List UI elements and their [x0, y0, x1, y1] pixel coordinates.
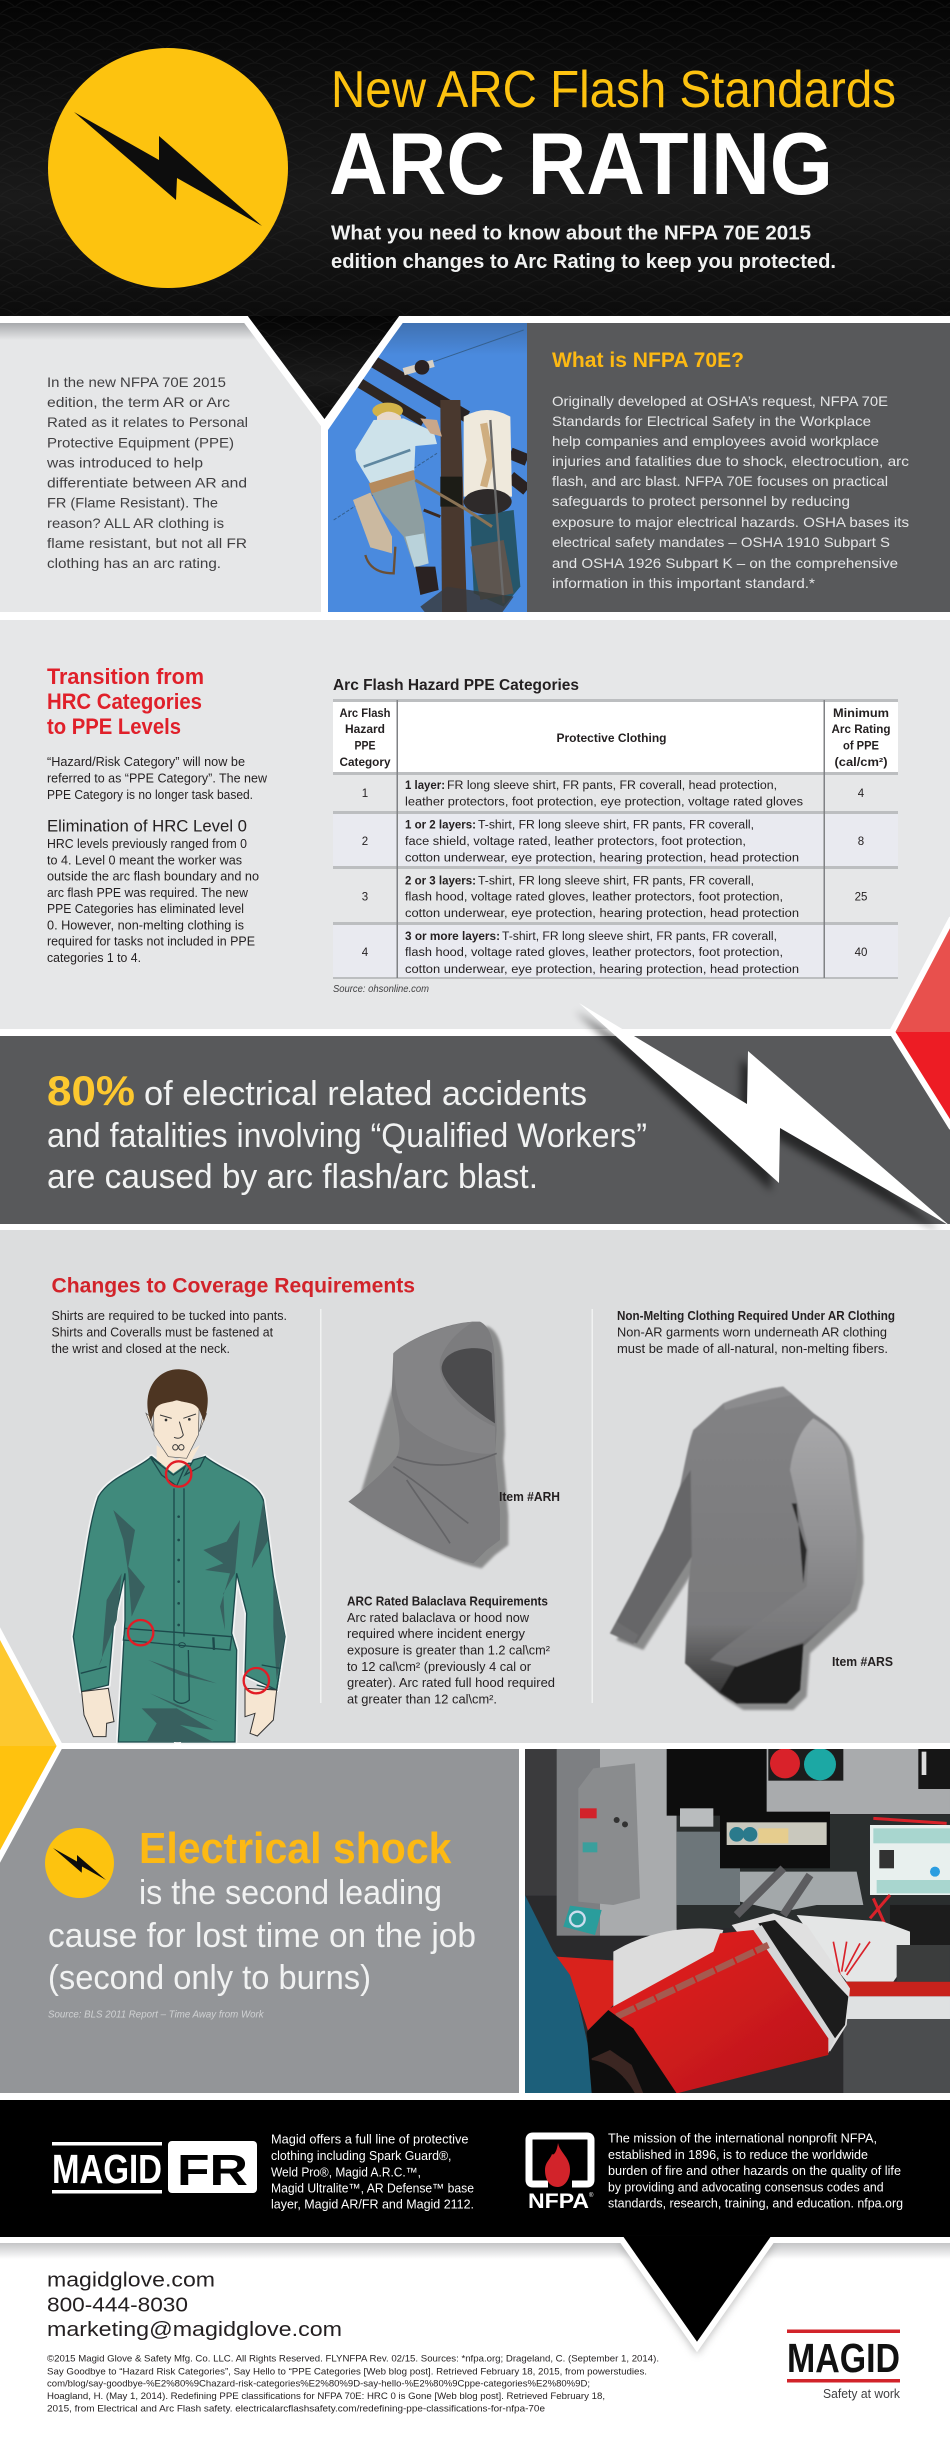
panel: intro left [0, 323, 321, 612]
subtitle: What you need to know about the NFPA 70E 2015 [331, 222, 811, 244]
table row 1: 1 layer: [405, 780, 445, 792]
table header row: PPE [354, 740, 376, 752]
non-melting clothing text: Non-Melting Clothing Required Under AR Clothing [617, 1309, 895, 1323]
shock text: is the second leading [139, 1874, 442, 1912]
subtitle [331, 222, 836, 273]
hazard risk category text: PPE Category is no longer task based. [47, 788, 253, 802]
banner text: are caused by arc flash/arc blast. [47, 1158, 538, 1196]
logo: MAGID FR [52, 2141, 257, 2195]
table row 4: T-shirt, FR long sleeve shirt, FR pants, FR coverall, [502, 931, 777, 943]
NFPA body text: safeguards to protect personnel by reducing [552, 493, 850, 509]
icon: yellow circle with lightning bolt [48, 48, 288, 288]
table row 4: cotton underwear, eye protection, hearing protection, head protection [405, 964, 799, 976]
logo: MAGID Safety at work: MAGID [787, 2335, 900, 2381]
contact details: marketing@magidglove.com [47, 2319, 342, 2341]
non-melting clothing text [617, 1309, 895, 1356]
banner text [47, 1075, 647, 1196]
table source: Source: ohsonline.com [333, 984, 429, 995]
elimination text: categories 1 to 4. [47, 951, 141, 965]
table row 4: 40 [855, 947, 867, 959]
decoration: yellow hexagon [0, 1628, 60, 1862]
Magid description text: Magid offers a full line of protective [271, 2132, 469, 2146]
heading: What is NFPA 70E?: What is NFPA 70E? [552, 349, 744, 372]
table header row: Minimum [833, 708, 889, 720]
shock source: Source: BLS 2011 Report – Time Away from Work [48, 2008, 264, 2020]
logo: MAGID FR: FR [177, 2146, 248, 2195]
title: New ARC Flash Standards: New ARC Flash Standards [331, 61, 896, 119]
legal and sources: Hoagland, H. (May 1, 2014). Redefining PPE classifications for NFPA 70E: HRC 0 is Gone [Web blog post]. Retrieved February 18, [47, 2391, 605, 2401]
table: PPE categories [333, 699, 898, 979]
NFPA body text: information in this important standard.* [552, 575, 816, 591]
logo: NFPA [528, 2136, 594, 2213]
shock text: cause for lost time on the job [48, 1917, 476, 1955]
balaclava requirements text: exposure is greater than 1.2 cal\cm² [347, 1644, 550, 1658]
panel: black footer band [0, 2100, 950, 2237]
legal and sources: com/blog/say-goodbye-%E2%80%9Chazard-risk-categories%E2%80%9D-say-hello-%E2%80%9Cppe-categories%E2%80%9D; [47, 2378, 590, 2388]
hazard risk category text: “Hazard/Risk Category” will now be [47, 755, 245, 769]
intro text: flame resistant, but not all FR [47, 535, 247, 551]
header band [0, 0, 950, 330]
photo: balaclava hood [348, 1322, 508, 1568]
table row 1: 4 [858, 788, 865, 800]
non-melting clothing text: Non-AR garments worn underneath AR clothing [617, 1326, 887, 1340]
legal and sources: Say Goodbye to “Hazard Risk Categories”, Say Hello to “PPE Categories [Web blog post]. Retrieved February 18, 2015, from powerstudies. [47, 2367, 647, 2377]
callouts: red circles on neck, waist, wrist [128, 1461, 269, 1693]
table row 2: T-shirt, FR long sleeve shirt, FR pants, FR coverall, [478, 820, 754, 832]
panel: what is NFPA 70E [527, 323, 950, 612]
intro text: FR (Flame Resistant). The [47, 494, 218, 510]
NFPA body text: and OSHA 1926 Subpart K – on the comprehensive [552, 555, 898, 571]
balaclava requirements text [347, 1594, 555, 1706]
table row 1: 1 [362, 788, 368, 800]
NFPA mission text: established in 1896, is to reduce the worldwide [608, 2148, 868, 2162]
NFPA body text [552, 393, 909, 591]
Magid description text: clothing including Spark Guard®, [271, 2149, 452, 2163]
intro text: differentiate between AR and [47, 474, 247, 490]
table row 3: 2 or 3 layers: [405, 876, 476, 888]
heading: Transition from HRC Categories to PPE Levels [47, 664, 204, 739]
banner text: and fatalities involving “Qualified Workers” [47, 1117, 647, 1155]
table row 2: 8 [858, 836, 864, 848]
table header row [340, 708, 890, 769]
balaclava requirements text: at greater than 12 cal\cm². [347, 1692, 497, 1706]
subtitle: edition changes to Arc Rating to keep you protected. [331, 251, 836, 273]
NFPA mission text: burden of fire and other hazards on the quality of life [608, 2164, 901, 2178]
title: ARC RATING: ARC RATING [329, 114, 833, 213]
legal and sources [47, 2354, 659, 2414]
table row 4: 4 [362, 947, 369, 959]
NFPA body text: injuries and fatalities due to shock, electrocution, arc [552, 453, 909, 469]
table row 2: 1 or 2 layers: [405, 820, 476, 832]
Magid description text: layer, Magid AR/FR and Magid 2112. [271, 2197, 474, 2211]
intro text: Rated as it relates to Personal [47, 414, 248, 430]
shirts text: Shirts and Coveralls must be fastened at [52, 1326, 274, 1340]
stat: 80%: 80% [47, 1067, 135, 1114]
table row 3: flash hood, voltage rated gloves, leather protectors, foot protection, [405, 892, 783, 904]
table header row: Hazard [345, 724, 385, 736]
hazard risk category text: referred to as “PPE Category”. The new [47, 772, 268, 786]
photo: gloved hand at electrical panel [525, 1748, 950, 2093]
shock text: (second only to burns) [48, 1959, 371, 1997]
balaclava requirements text: ARC Rated Balaclava Requirements [347, 1594, 548, 1608]
table title: Arc Flash Hazard PPE Categories [333, 677, 579, 694]
table row 4: flash hood, voltage rated gloves, leather protectors, foot protection, [405, 947, 783, 959]
NFPA mission text [608, 2132, 903, 2211]
NFPA body text: electrical safety mandates – OSHA 1910 Subpart S [552, 534, 890, 550]
NFPA mission text: standards, research, training, and education. nfpa.org [608, 2197, 903, 2211]
NFPA body text: Standards for Electrical Safety in the Workplace [552, 413, 871, 429]
icon: white lightning bolt [575, 1003, 950, 1232]
shirts text: Shirts are required to be tucked into pants. [52, 1309, 287, 1323]
elimination text: arc flash PPE was required. The new [47, 886, 249, 900]
item label: ARS: Item #ARS [832, 1655, 893, 1669]
intro text: clothing has an arc rating. [47, 555, 221, 571]
panel: lineman photo [327, 320, 532, 615]
contact details [47, 2270, 342, 2341]
shirts text [52, 1309, 287, 1356]
table row 3: cotton underwear, eye protection, hearing protection, head protection [405, 908, 799, 920]
intro text: In the new NFPA 70E 2015 [47, 374, 226, 390]
panel: coverage requirements [0, 1230, 950, 1743]
table row 2: 2 [362, 836, 368, 848]
hazard risk category text [47, 755, 268, 802]
logo: NFPA: NFPA [528, 2190, 589, 2213]
elimination text: PPE Categories has eliminated level [47, 902, 244, 916]
table header row: of PPE [843, 740, 879, 752]
intro text: was introduced to help [46, 454, 203, 470]
table row 3 [362, 876, 867, 920]
panel: 80% banner [0, 1036, 950, 1224]
table row 3: T-shirt, FR long sleeve shirt, FR pants, FR coverall, [478, 876, 754, 888]
table header row: Protective Clothing [556, 733, 666, 745]
table row 4 [362, 931, 867, 976]
table header row: (cal/cm²) [834, 757, 888, 769]
illustration: worker in shirt [73, 1369, 285, 1742]
shirts text: the wrist and closed at the neck. [52, 1342, 230, 1356]
elimination text: 0. However, non-melting clothing is [47, 918, 244, 932]
icon: small yellow circle with bolt [45, 1828, 114, 1898]
intro text: reason? ALL AR clothing is [47, 515, 224, 531]
heading: Transition from HRC Categories to PPE Levels: Transition from [47, 664, 204, 689]
table row 1 [362, 780, 865, 809]
table header row: Arc Rating [832, 724, 890, 736]
table header row: Arc Flash [340, 708, 390, 720]
contact details: magidglove.com [47, 2270, 215, 2292]
heading: Transition from HRC Categories to PPE Levels: HRC Categories [47, 689, 202, 714]
table row 1: FR long sleeve shirt, FR pants, FR coverall, head protection, [447, 780, 777, 792]
shock text [48, 1874, 476, 1997]
item label: ARH: Item #ARH [499, 1490, 560, 1504]
Magid description text: Magid Ultralite™, AR Defense™ base [271, 2181, 474, 2195]
elimination text: HRC levels previously ranged from 0 [47, 837, 247, 851]
table row 4: 3 or more layers: [405, 931, 500, 943]
NFPA body text: help companies and employees avoid workplace [552, 433, 879, 449]
logo: MAGID Safety at work [787, 2330, 900, 2401]
table row 3: 25 [855, 892, 867, 904]
heading: Changes to Coverage Requirements: Changes to Coverage Requirements [52, 1274, 415, 1298]
contact details: 800-444-8030 [47, 2295, 188, 2317]
balaclava requirements text: Arc rated balaclava or hood now [347, 1611, 530, 1625]
panel: transition section [0, 620, 950, 1029]
NFPA body text: exposure to major electrical hazards. OSHA bases its [552, 514, 909, 530]
logo: MAGID FR: MAGID [52, 2146, 162, 2192]
NFPA mission text: The mission of the international nonprofit NFPA, [608, 2132, 877, 2146]
elimination text: outside the arc flash boundary and no [47, 870, 259, 884]
intro text: edition, the term AR or Arc [47, 394, 230, 410]
Magid description text: Weld Pro®, Magid A.R.C.™, [271, 2165, 421, 2179]
heading: Transition from HRC Categories to PPE Levels: to PPE Levels [47, 714, 181, 739]
legal and sources: ©2015 Magid Glove & Safety Mfg. Co. LLC. All Rights Reserved. FLYNFPA Rev. 02/15. Sources: *nfpa.org; Drageland, C. (September 1, 2014). [47, 2354, 659, 2364]
elimination text [47, 837, 259, 965]
table row 1: leather protectors, foot protection, eye protection, voltage rated gloves [405, 797, 803, 809]
table row 2: face shield, voltage rated, leather protectors, foot protection, [405, 836, 746, 848]
table row 2: cotton underwear, eye protection, hearing protection, head protection [405, 852, 799, 864]
header notch and white rule [0, 316, 950, 425]
photo: long sleeve shirt [610, 1387, 863, 1710]
NFPA body text: Originally developed at OSHA’s request, NFPA 70E [552, 393, 888, 409]
NFPA mission text: by providing and advocating consensus codes and [608, 2181, 884, 2195]
table row 3: 3 [362, 892, 368, 904]
Magid description text [271, 2132, 474, 2211]
logo: MAGID Safety at work: Safety at work [823, 2386, 900, 2401]
legal and sources: 2015, from Electrical and Arc Flash safety. electricalarcflashsafety.com/redefining-ppe-classifications-for-nfpa-70e [47, 2404, 545, 2414]
elimination text: required for tasks not included in PPE [47, 935, 255, 949]
table row 2 [362, 820, 864, 864]
logo: NFPA: ® [589, 2192, 594, 2199]
footer pointer [0, 2236, 950, 2355]
non-melting clothing text: must be made of all-natural, non-melting fibers. [617, 1342, 888, 1356]
intro text: Protective Equipment (PPE) [47, 434, 234, 450]
balaclava requirements text: to 12 cal\cm² (previously 4 cal or [347, 1660, 531, 1674]
heading: Electrical shock: Electrical shock [139, 1824, 452, 1873]
decoration: red hexagon [892, 918, 950, 1128]
NFPA body text: flash, and arc blast. NFPA 70E focuses on practical [552, 473, 888, 489]
intro text [46, 374, 248, 571]
heading: Elimination of HRC Level 0: Elimination of HRC Level 0 [47, 816, 247, 836]
elimination text: to 4. Level 0 meant the worker was [47, 853, 242, 867]
table header row: Category [340, 757, 391, 769]
balaclava requirements text: required where incident energy [347, 1627, 526, 1641]
banner text: of electrical related accidents [144, 1075, 587, 1113]
panel: electrical shock [0, 1749, 519, 2093]
balaclava requirements text: greater). Arc rated full hood required [347, 1676, 555, 1690]
